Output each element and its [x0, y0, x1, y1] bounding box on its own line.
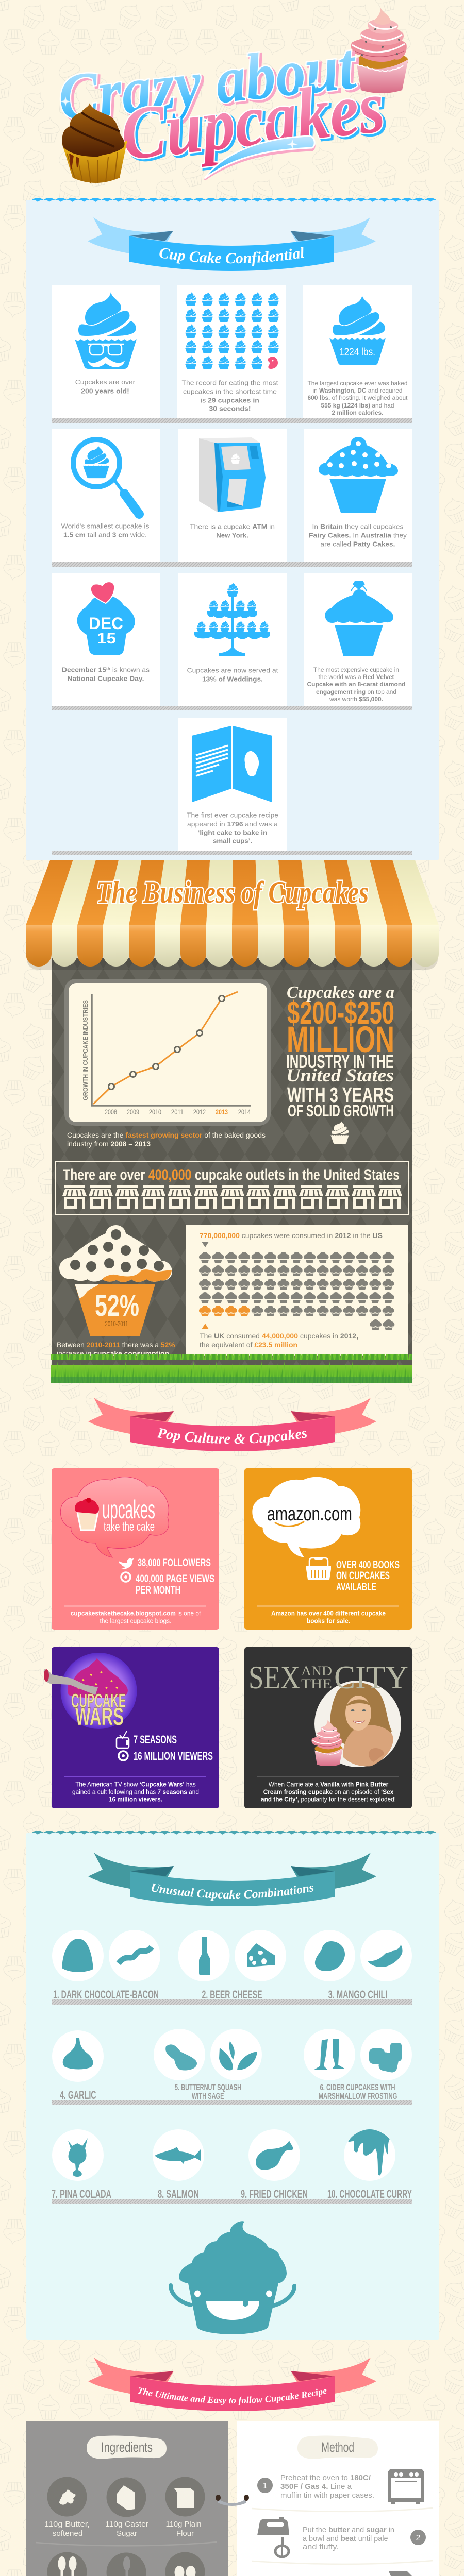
fact text: [190, 522, 275, 539]
hatch shelves: [52, 418, 412, 855]
stat: books: [336, 1559, 400, 1593]
heading pill: [87, 2436, 167, 2459]
icon: salmon: [155, 2147, 201, 2164]
fact text: was worth $55,000.: [329, 697, 383, 703]
caption: cupcakestakethecake.blogspot.com is one of: [71, 1609, 201, 1617]
fact text: small cups’.: [213, 837, 252, 845]
icon: quarter teaspoon: [123, 2556, 130, 2576]
consumption caption: Between 2010-2011 there was a 52%: [57, 1341, 175, 1349]
ribbon: Pop Culture & Cupcakes: Pop Culture & Cupcakes: [157, 1428, 307, 1446]
step 2: 2: [416, 2534, 421, 2543]
icon: cupcake tier stand: [194, 583, 270, 656]
ingredient labels: softened: [53, 2529, 82, 2538]
panel: The Business of Cupcakes: [26, 860, 439, 1383]
chart caption: industry from 2008 – 2013: [67, 1140, 151, 1148]
UK stat: The UK consumed 44,000,000 cupcakes in 2012,: [200, 1332, 358, 1340]
y axis label: GROWTH IN CUPCAKE INDUSTRIES: [81, 1000, 89, 1100]
fact text: The record for eating the most: [181, 379, 278, 386]
card: 200 years old: [52, 285, 160, 418]
card: Amazon: [244, 1468, 412, 1630]
icon: 1224 lbs cupcake: [329, 295, 386, 365]
fact text: In Britain they call cupcakes: [312, 522, 404, 531]
card: weddings: [178, 573, 287, 706]
caption: 16 million viewers.: [109, 1795, 162, 1803]
stat: followers: [119, 1557, 211, 1569]
marker down: [202, 1242, 209, 1247]
fact text: World's smallest cupcake is: [61, 522, 150, 530]
outlets headline: There are over 400,000 cupcake outlets in the United States: [63, 1166, 400, 1183]
icon: sugar bag: [117, 2485, 135, 2510]
caption: the largest cupcake blogs.: [100, 1617, 171, 1625]
headline stat: $200-$250: [287, 995, 394, 1031]
divider: [257, 1605, 399, 1607]
header: Crazy about Cupcakes: [55, 8, 408, 183]
caption: [71, 1609, 201, 1625]
stat: books: OVER 400 BOOKS: [336, 1559, 400, 1571]
panel: Cup Cake Confidential: [26, 198, 439, 860]
card: eating record: [177, 285, 286, 418]
fact text: 13% of Weddings.: [202, 675, 263, 683]
icon: garlic: [63, 2038, 93, 2069]
stat: seasons: 7 SEASONS: [134, 1733, 177, 1746]
step 1: muffin tin with paper cases.: [280, 2491, 374, 2500]
year labels: 2011: [171, 1108, 184, 1116]
ingredient labels: Sugar: [117, 2529, 137, 2538]
fact text: [187, 811, 278, 845]
title: Crazy about: Crazy about: [55, 29, 360, 134]
icon: oven: [388, 2469, 424, 2504]
growth line: [93, 992, 238, 1104]
speech bubble logo: take the cake: [104, 1520, 155, 1534]
ribbon: recipe heading: The Ultimate and Easy to follow Cupcake Recipe: [138, 2387, 327, 2405]
show title: THE: [301, 1676, 332, 1691]
show title: [248, 1659, 408, 1696]
fact text: [307, 667, 405, 703]
headline stat: MILLION: [287, 1020, 394, 1060]
axes: [92, 994, 251, 1106]
fact text: cupcakes in the shortest time: [183, 387, 277, 396]
combination labels: WITH SAGE: [192, 2091, 224, 2101]
icon: cheese: [247, 1943, 275, 1967]
year labels: 2014: [238, 1108, 251, 1116]
store icons: [62, 1185, 402, 1209]
fact text: There is a cupcake ATM in: [190, 522, 275, 531]
combination labels: 7. PINA COLADA: [52, 2188, 111, 2200]
illustration: chocolate cupcake: [62, 103, 127, 183]
icon: sprinkled cupcake: [319, 437, 398, 513]
fact text: December 15: [62, 666, 106, 674]
fact text: engagement ring on top and: [316, 689, 396, 696]
combination labels: 4. GARLIC: [60, 2089, 96, 2102]
fact text: ‘light cake to bake in: [198, 828, 268, 837]
ribbon heading: [88, 1853, 376, 1906]
line chart card: [64, 979, 271, 1126]
icon: fried chicken: [256, 2141, 293, 2170]
fact text: [187, 667, 278, 683]
fact text: The largest cupcake ever was baked: [307, 381, 407, 387]
fact text: th: [106, 667, 110, 671]
headline stat: [286, 983, 394, 1120]
year labels: 2010: [149, 1108, 161, 1116]
show logo: CUPCAKE: [71, 1690, 126, 1712]
icon: Dec 15 cupcake: DEC: [89, 614, 123, 633]
fact text: 1.5 cm tall and 3 cm wide.: [63, 531, 147, 539]
icon: magnifying glass: [73, 439, 139, 514]
fact text: National Cupcake Day.: [67, 675, 144, 682]
step 2: and fluffy.: [303, 2543, 339, 2551]
card: cupcake ATM: [178, 429, 287, 562]
awning: [26, 860, 439, 970]
panel: Unusual Cupcake Combinations: [26, 1831, 439, 2340]
white circles: [52, 1930, 412, 2181]
icon: sage: [219, 2041, 257, 2070]
speech bubble logo: [60, 1477, 169, 1557]
card: most expensive: [304, 573, 412, 706]
icon: cupcake with diamond ring: [325, 581, 393, 656]
stat: viewers: [119, 1750, 213, 1762]
heading pill: [297, 2436, 378, 2459]
combination labels: 3. MANGO CHILI: [328, 1988, 388, 2001]
heading pill: Ingredients: [101, 2439, 153, 2455]
divider: [64, 1605, 206, 1607]
ingredient labels: 110g Caster: [105, 2520, 148, 2529]
UK stat: [200, 1332, 358, 1349]
chart caption: [67, 1131, 266, 1148]
data points: [108, 995, 225, 1089]
icon: chocolate truffle: [62, 1939, 93, 1972]
fact text: [181, 379, 278, 412]
fact text: Cupcake with an 8-carat diamond: [307, 682, 405, 688]
year labels: 2008: [105, 1108, 117, 1116]
title: Cupcakes: Cupcakes: [117, 65, 388, 176]
scalloped edge: [32, 1830, 436, 1835]
icon: eggs: [174, 2566, 196, 2576]
icon: butternut squash: [165, 2044, 197, 2070]
heading: The Business of Cupcakes: [96, 875, 369, 909]
combination labels: 8. SALMON: [158, 2188, 199, 2200]
card: first recipe: [178, 718, 287, 851]
year labels: [105, 1108, 251, 1116]
icon: flour and salt: [372, 2571, 426, 2576]
chart caption: Cupcakes are the fastest growing sector of the baked goods: [67, 1131, 266, 1139]
stat: viewers: 16 MILLION VIEWERS: [134, 1750, 213, 1762]
icon: butter: [59, 2489, 76, 2505]
icon: basket: [306, 1557, 331, 1580]
caption: gained a cult following and has 7 seasons and: [72, 1788, 199, 1796]
show logo: WARS: [75, 1703, 124, 1731]
stat: page views: PER MONTH: [136, 1584, 180, 1596]
year labels: 2009: [127, 1108, 139, 1116]
illustration: pink cupcake: [351, 8, 408, 93]
combination labels: 6. CIDER CUPCAKES WITH: [320, 2082, 395, 2092]
card: Sex and the City: [244, 1647, 412, 1808]
fact text: [61, 522, 150, 539]
title: Cupcakes: Cupcakes: [119, 67, 391, 178]
consumption card: [186, 1225, 408, 1356]
marker up: [202, 1324, 209, 1329]
shop front wall: [52, 958, 412, 1383]
combination labels: 5. BUTTERNUT SQUASH: [175, 2082, 241, 2092]
step 3: [257, 2571, 426, 2576]
icon grid: 29 cupcakes: [185, 292, 279, 369]
portrait: [314, 1681, 401, 1767]
icon: pina colada: [68, 2138, 88, 2177]
ingredient circles: [47, 2477, 205, 2576]
fact text: Fairy Cakes. In Australia they: [309, 532, 407, 539]
US stat: 770,000,000 cupcakes were consumed in 2012 in the US: [200, 1231, 383, 1240]
icon: chili: [368, 1944, 403, 1967]
consumption caption: increase in cupcake consumption: [57, 1349, 169, 1358]
caption: [271, 1609, 386, 1625]
ribbon heading: [88, 217, 376, 271]
stat: books: AVAILABLE: [336, 1581, 376, 1593]
combination labels: [52, 1988, 412, 2200]
combination labels: 10. CHOCOLATE CURRY: [327, 2188, 412, 2200]
show logo: [44, 1653, 137, 1731]
icon: small cupcake: [330, 1121, 349, 1144]
mascot cupcake: [171, 2221, 294, 2334]
fact text: appeared in 1796 and was a: [187, 820, 278, 828]
icon: flour bag: [174, 2488, 194, 2508]
panel: Ingredients: [26, 2421, 228, 2576]
stat: followers: 38,000 FOLLOWERS: [138, 1557, 211, 1569]
panel: Method: [237, 2421, 439, 2576]
stat: books: ON CUPCAKES: [336, 1570, 390, 1582]
icon: Dec 15 cupcake: 15: [97, 630, 116, 647]
fact text: is 29 cupcakes in: [201, 397, 259, 404]
icon: bacon: [119, 1947, 152, 1963]
ribbon heading: Cup Cake Confidential: [159, 247, 304, 266]
title: Crazy about: Crazy about: [57, 31, 362, 137]
fact text: The most expensive cupcake in: [313, 667, 399, 673]
caption: [261, 1781, 396, 1803]
ribbon heading: Unusual Cupcake Combinations: [152, 1884, 313, 1901]
title swoosh: [205, 136, 314, 180]
year labels: 2013: [216, 1108, 228, 1116]
caption: books for sale.: [307, 1617, 350, 1625]
stat: page views: 400,000 PAGE VIEWS: [136, 1573, 214, 1585]
headline stat: WITH 3 YEARS: [287, 1083, 394, 1107]
heading pill: Method: [321, 2439, 354, 2455]
caption: Amazon has over 400 different cupcake: [271, 1609, 386, 1617]
icon: mango: [315, 1941, 345, 1971]
icon: chocolate drips: [348, 2129, 390, 2176]
card: largest cupcake: [303, 285, 412, 418]
speech bubble logo: upcakes: [102, 1495, 155, 1524]
fact text: The first ever cupcake recipe: [187, 811, 278, 819]
52% cupcake: 2010-2011: [105, 1319, 128, 1328]
card: national cupcake day: [52, 573, 160, 706]
step 1: 350F / Gas 4. Line a: [280, 2482, 352, 2491]
headline stat: INDUSTRY IN THE: [286, 1051, 394, 1072]
caption: and the City’, popularity for the dessert exploded!: [261, 1795, 396, 1803]
ingredient labels: 110g Plain: [166, 2520, 201, 2529]
caption: The American TV show ‘Cupcake Wars’ has: [75, 1781, 196, 1788]
icon: two teaspoons: [58, 2556, 76, 2576]
card: Cupcakes Take the Cake: [52, 1468, 219, 1630]
icon: recipe book: [192, 726, 272, 802]
card: fairy cakes: [304, 429, 412, 562]
divider: [64, 1776, 206, 1777]
fact text: [75, 378, 136, 395]
headline stat: Cupcakes are a: [287, 983, 394, 1002]
card: smallest cupcake: [52, 429, 160, 562]
fact text: [309, 522, 407, 548]
fact text: 200 years old!: [81, 387, 129, 395]
icon: Dec 15 cupcake: [77, 582, 135, 655]
outlets box: [56, 1162, 409, 1215]
fact text: is known as: [110, 666, 150, 674]
icon: 1224 lbs cupcake: 1224 lbs.: [339, 346, 375, 358]
rope binding top: [216, 2495, 249, 2506]
caption: [72, 1781, 199, 1803]
show title: AND: [301, 1664, 332, 1679]
icon: beer bottle: [199, 1937, 210, 1975]
show title: CITY: [334, 1659, 408, 1696]
fact text: 30 seconds!: [209, 405, 251, 412]
icon: hand mixer: [257, 2517, 289, 2557]
fact text: 555 kg (1224 lbs) and had: [321, 403, 394, 409]
ingredient labels: 110g Butter,: [44, 2520, 90, 2529]
step 2: [257, 2517, 426, 2557]
headline stat: United States: [286, 1065, 394, 1086]
combination labels: 1. DARK CHOCOLATE-BACON: [53, 1988, 159, 2001]
step 2: a bowl and beat until pale: [303, 2534, 388, 2543]
combination labels: 9. FRIED CHICKEN: [241, 2188, 308, 2200]
fact text: 2 million calories.: [332, 410, 384, 416]
ingredient labels: Flour: [176, 2529, 194, 2538]
year labels: 2012: [193, 1108, 206, 1116]
divider: [257, 1776, 399, 1777]
consumption caption: [57, 1341, 175, 1358]
show title: SEX: [248, 1659, 300, 1696]
fact text: [307, 381, 408, 416]
combination labels: 2. BEER CHEESE: [202, 1988, 262, 2001]
step 1: [257, 2469, 424, 2504]
fact text: the world was a Red Velvet: [319, 674, 394, 681]
stat: seasons: [117, 1731, 177, 1748]
caption: Cream frosting cupcake on an episode of ‘Sex: [263, 1788, 394, 1796]
fact text: New York.: [216, 532, 248, 539]
icon: marshmallows: [369, 2043, 402, 2073]
speech bubble logo: [252, 1477, 360, 1557]
52% cupcake: [59, 1225, 172, 1336]
pink cupcake: [311, 1720, 343, 1767]
grass: [51, 1354, 412, 1383]
step 1: Preheat the oven to 180C/: [280, 2473, 371, 2482]
fact text: in Washington, DC and required: [312, 388, 402, 394]
caption: When Carrie ate a Vanilla with Pink Butter: [269, 1781, 388, 1788]
headline stat: OF SOLID GROWTH: [288, 1101, 394, 1120]
sparkles: [60, 78, 322, 149]
step 2: Put the butter and sugar in: [303, 2526, 394, 2534]
step 1: 1: [263, 2482, 268, 2490]
icon: hipster cupcake: [75, 292, 137, 369]
fact text: 600 lbs. of frosting. It weighed about: [307, 395, 408, 401]
ingredient labels: [43, 2520, 202, 2576]
fact text: [62, 666, 150, 682]
stat: page views: [121, 1572, 214, 1596]
ribbon: recipe heading: [88, 2358, 376, 2411]
scalloped edge: [32, 197, 436, 202]
cupcake grid: [199, 1252, 394, 1330]
fact text: are called Patty Cakes.: [321, 540, 395, 548]
icon: champagne flutes: [313, 2039, 345, 2070]
icon: ATM machine: [199, 437, 266, 512]
fact text: Cupcakes are over: [75, 378, 136, 386]
hatch shelves: [52, 1999, 412, 2204]
card: Cupcake Wars: [44, 1647, 219, 1808]
ribbon: Pop Culture & Cupcakes: [88, 1398, 376, 1451]
speech bubble logo: amazon.com: [267, 1503, 352, 1525]
UK stat: the equivalent of £23.5 million: [200, 1341, 297, 1349]
combination labels: MARSHMALLOW FROSTING: [319, 2091, 397, 2101]
52% cupcake: 52%: [95, 1289, 139, 1323]
fact text: Cupcakes are now served at: [187, 667, 278, 674]
